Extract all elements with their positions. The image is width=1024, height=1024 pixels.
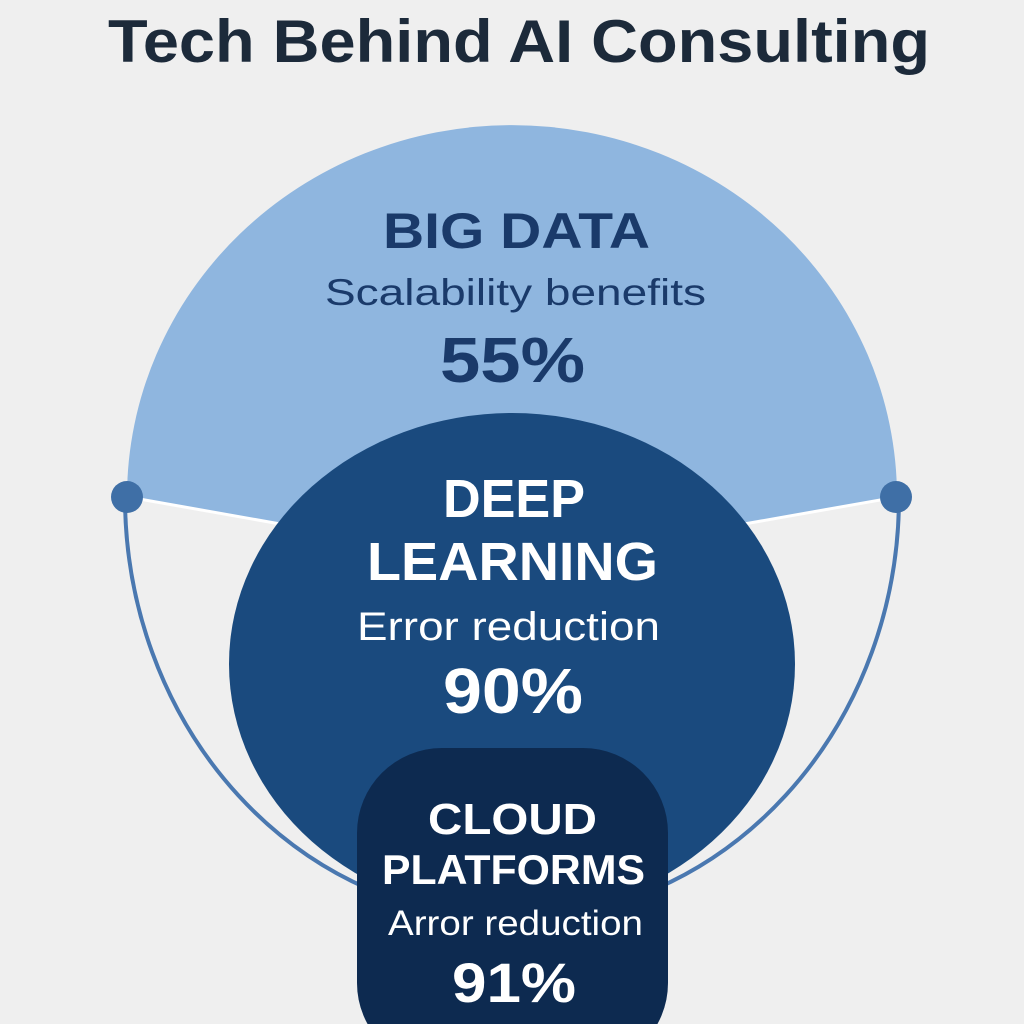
panel: cloud platforms: 91% <box>452 951 576 1014</box>
outline arc <box>125 497 899 919</box>
panel: cloud platforms: PLATFORMS <box>382 846 645 893</box>
icon: right dot <box>880 481 912 513</box>
panel: cloud platforms: Arror reduction <box>388 904 643 943</box>
panel: deep learning circle: 90% <box>443 655 583 727</box>
panel: deep learning circle: LEARNING <box>367 532 658 592</box>
panel: deep learning circle: Error reduction <box>357 605 660 649</box>
panel: big data segment <box>125 125 899 919</box>
text: big data <box>325 203 706 396</box>
text: big data: BIG DATA <box>383 203 650 259</box>
panel: cloud platforms: CLOUD <box>428 795 597 844</box>
panel: cloud platforms <box>357 748 668 1024</box>
icon: left dot <box>111 481 143 513</box>
text: big data: 55% <box>440 324 585 396</box>
text: big data: Scalability benefits <box>325 272 706 313</box>
panel: deep learning circle: DEEP <box>443 469 585 529</box>
panel: deep learning circle <box>229 413 795 915</box>
title: Tech Behind AI Consulting <box>108 8 930 75</box>
